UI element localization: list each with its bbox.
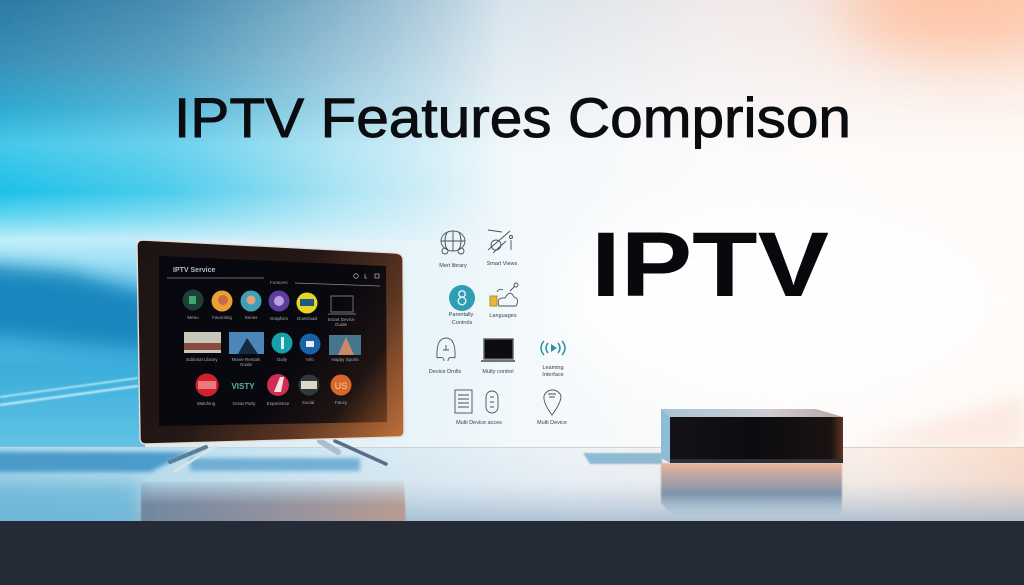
box shadow (583, 453, 662, 464)
app row 1: Graphics (270, 316, 289, 321)
icon: languages cloud (490, 283, 518, 306)
app row 2: Daily (277, 357, 288, 362)
app row 1: Favoriting (212, 315, 232, 320)
icon: laptop (481, 339, 515, 361)
icon labels: Interface (542, 372, 564, 378)
app row 2: Guide (240, 362, 252, 367)
dark base band (0, 521, 1024, 585)
floor surface (0, 447, 1024, 532)
tv screen (159, 256, 387, 426)
tv stand (170, 441, 386, 471)
icon: document list (455, 390, 472, 413)
icon labels: Languages (489, 313, 517, 319)
set-top box (583, 409, 843, 515)
icon: wireless streaming (541, 341, 565, 355)
screen header: Features (270, 280, 289, 285)
app row 3: US (335, 381, 347, 391)
icon labels (429, 261, 567, 426)
box reflection (661, 463, 842, 515)
icon: remote control (486, 391, 498, 413)
feature icons cluster (429, 230, 567, 426)
app row 1: Smart Device (327, 317, 355, 322)
icon: parental controls (449, 285, 475, 311)
icon: globe library (441, 231, 465, 254)
box side (661, 409, 670, 463)
app row 1: Menu (187, 315, 199, 320)
app row 2: Info (306, 357, 314, 362)
app row 1: Download (297, 316, 318, 321)
app row 1: Series (245, 315, 258, 320)
background gradient (0, 0, 1024, 447)
icon: device profile (437, 338, 455, 361)
app row 3: Experience (267, 401, 290, 406)
icon: smart views (488, 230, 512, 253)
screen header: IPTV Service (173, 267, 216, 274)
icon labels: Multi Device acces (456, 420, 502, 426)
app row 3: Great Party (232, 401, 256, 406)
television (137, 240, 404, 471)
icon: location pin (544, 390, 561, 415)
box top (661, 409, 843, 417)
icon labels: Smart Views (487, 261, 518, 267)
app row 2: Movie Rentals (232, 357, 261, 362)
app row 3: Watching (197, 401, 216, 406)
app row 3: Fancy (335, 400, 348, 405)
tv reflection (140, 480, 406, 521)
app row 1: Guide (335, 322, 347, 327)
IPTV wordmark: IPTV (591, 214, 829, 316)
app row 2: Editorial Library (186, 357, 218, 362)
app row 1 (182, 290, 356, 327)
icon labels: Mert library (439, 263, 467, 269)
title: IPTV Features Comprison (174, 86, 851, 149)
box front (670, 417, 843, 463)
icon labels: Multy control (482, 369, 514, 375)
app row 3: Social (302, 400, 314, 405)
app row 2 (184, 332, 361, 367)
app row 2: Happy Sports (331, 357, 359, 362)
tv bezel (137, 240, 404, 444)
icon labels: Multi Device (537, 420, 567, 426)
icon labels: Parentally (449, 312, 473, 318)
icon labels: Device Drolls (429, 369, 461, 375)
screen header (167, 267, 380, 286)
app row 3 (196, 374, 352, 406)
app row 3: VISTY (231, 382, 255, 391)
icon labels: Leaming (542, 365, 564, 371)
icon labels: Controls (452, 320, 472, 326)
